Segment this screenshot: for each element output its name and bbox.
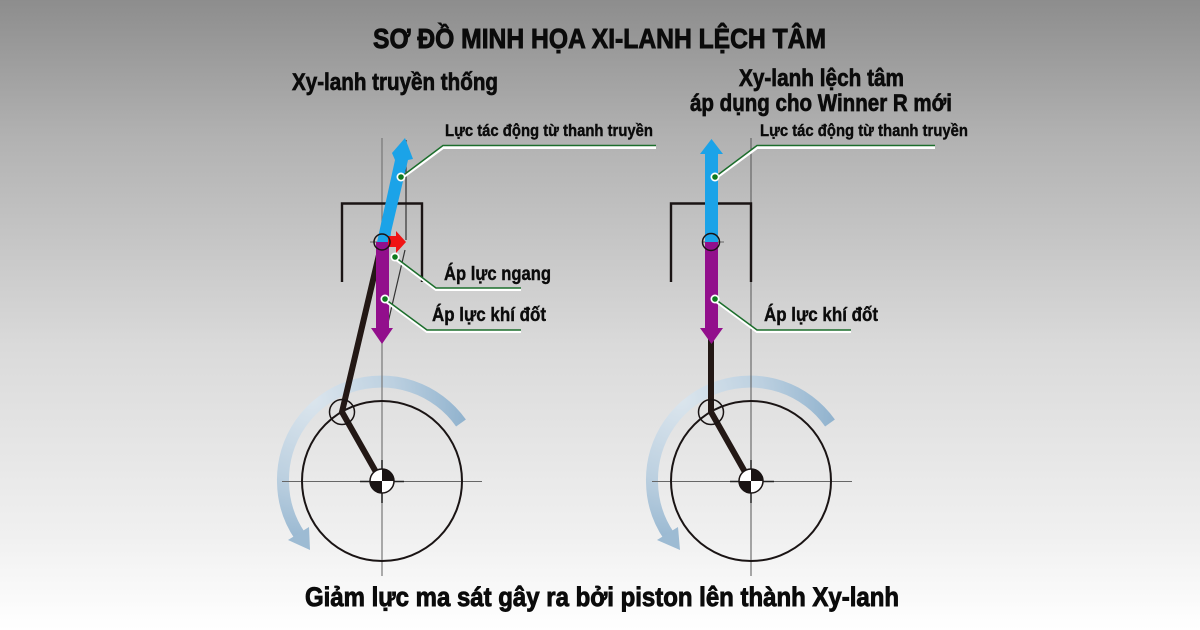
title: SƠ ĐỒ MINH HỌA XI-LANH LỆCH TÂM [373, 23, 826, 54]
piston [342, 204, 422, 282]
axis lines [282, 138, 482, 576]
crank pin circle [698, 400, 724, 424]
rotation arc arrow [283, 382, 461, 550]
diagram: offset cylinder [652, 138, 852, 576]
purple arrow: gas pressure [700, 242, 723, 344]
blue arrow: rod force [700, 139, 723, 242]
crank centre [739, 469, 763, 493]
heading: offset cylinder: áp dụng cho Winner R mới [690, 90, 952, 117]
callout: rod force, right: Lực tác động từ thanh truyền [760, 122, 968, 140]
purple arrow: gas pressure [371, 242, 393, 344]
blue arrow: rod force [377, 138, 413, 242]
callout: rod force, left: Lực tác động từ thanh truyền [445, 122, 653, 140]
piston pin circle [702, 234, 720, 250]
callout: gas pressure, left [380, 294, 547, 332]
callout: lateral pressure: Áp lực ngang [444, 263, 551, 285]
rotation arc arrow [652, 382, 830, 550]
heading: conventional cylinder: Xy-lanh truyền thống [292, 69, 498, 96]
callout: lateral pressure [390, 252, 551, 290]
crank pin circle [330, 400, 354, 424]
callout: rod force, left [396, 122, 656, 182]
callout: rod force, right [710, 122, 968, 182]
crank circle [671, 401, 831, 561]
bottom caption: Giảm lực ma sát gây ra bởi piston lên thành Xy-lanh [305, 582, 899, 612]
callout: gas pressure, right [710, 294, 879, 332]
connecting rod and crank arm [711, 242, 745, 472]
axis lines [652, 138, 852, 576]
callout: gas pressure, left: Áp lực khí đốt [432, 304, 547, 326]
callout: gas pressure, right: Áp lực khí đốt [764, 304, 879, 326]
red arrow: lateral pressure [388, 231, 406, 253]
crank centre [370, 469, 394, 493]
piston pin circle [374, 234, 390, 250]
heading: offset cylinder [690, 65, 952, 117]
connecting rod and crank arm [342, 242, 382, 472]
piston [671, 204, 751, 282]
diagram: conventional cylinder [282, 138, 482, 576]
heading: offset cylinder: Xy-lanh lệch tâm [739, 65, 904, 92]
crank circle [302, 401, 462, 561]
